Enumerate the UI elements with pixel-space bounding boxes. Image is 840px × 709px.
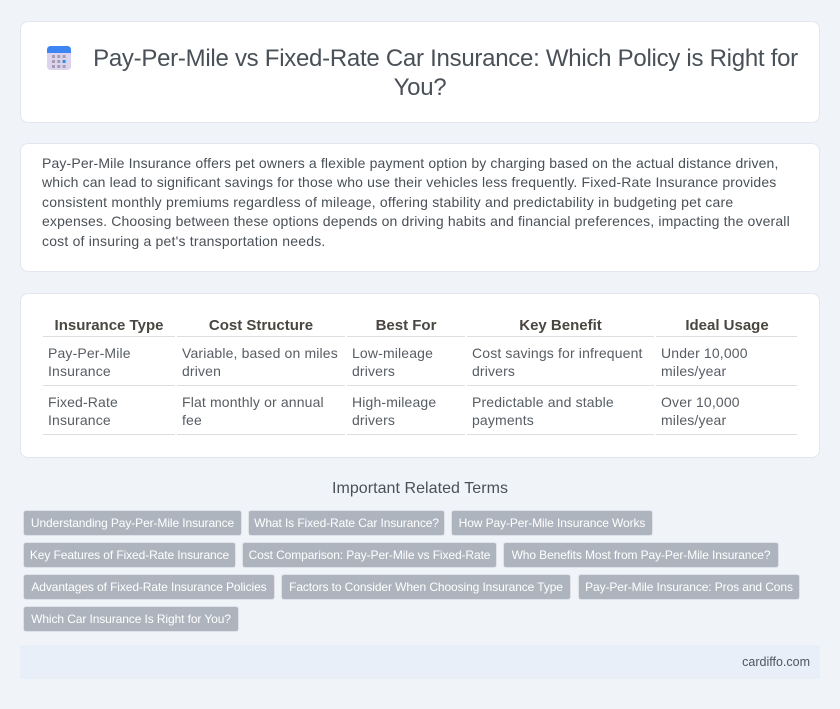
related terms tags: How Pay-Per-Mile Insurance Works: [459, 516, 645, 530]
comparison table: Under 10,000: [661, 345, 748, 361]
header panel: [20, 21, 820, 123]
intro text: consistent monthly premiums regardless of mileage, offering stability and predictability in budgeting pet care: [42, 194, 733, 210]
comparison table: Cost savings for infrequent: [472, 345, 643, 361]
comparison table: Insurance: [48, 412, 111, 428]
comparison table: Variable, based on miles: [182, 345, 338, 361]
comparison table: Best For: [376, 317, 436, 334]
related terms tags: Who Benefits Most from Pay-Per-Mile Insurance?: [512, 548, 770, 562]
comparison table: Low-mileage: [352, 345, 433, 361]
footer source: cardiffo.com: [742, 655, 810, 669]
footer: [20, 645, 820, 679]
comparison table: Over 10,000: [661, 394, 740, 410]
comparison table: miles/year: [661, 363, 726, 379]
comparison table: Ideal Usage: [685, 317, 769, 334]
intro text: which can lead to significant savings for those who use their vehicles less frequently. Fixed-Rate Insurance provides: [42, 174, 776, 190]
comparison table: driven: [182, 363, 221, 379]
comparison table: Flat monthly or annual: [182, 394, 324, 410]
related terms tags: Advantages of Fixed-Rate Insurance Policies: [31, 580, 267, 594]
comparison table: payments: [472, 412, 534, 428]
comparison table: High-mileage: [352, 394, 436, 410]
comparison table: Key Benefit: [519, 317, 602, 334]
comparison table: drivers: [472, 363, 515, 379]
related terms tags: Factors to Consider When Choosing Insurance Type: [289, 580, 563, 594]
table panel: [20, 293, 820, 458]
title: Pay-Per-Mile vs Fixed-Rate Car Insurance: Which Policy is Right for: [93, 45, 798, 72]
intro text: Pay-Per-Mile Insurance offers pet owners a flexible payment option by charging based on the actual distance driven,: [42, 155, 778, 171]
title: You?: [394, 74, 446, 101]
comparison table: miles/year: [661, 412, 726, 428]
related terms tags: What Is Fixed-Rate Car Insurance?: [254, 516, 439, 530]
comparison table: drivers: [352, 363, 395, 379]
comparison table: drivers: [352, 412, 395, 428]
comparison table: Pay-Per-Mile: [48, 345, 131, 361]
related terms tags: Pay-Per-Mile Insurance: Pros and Cons: [585, 580, 793, 594]
comparison table: Predictable and stable: [472, 394, 614, 410]
related terms tags: Which Car Insurance Is Right for You?: [31, 612, 231, 626]
related terms tags: [23, 510, 800, 632]
intro text: expenses. Choosing between these options depends on driving habits and financial preferences, impacting the overall: [42, 213, 790, 229]
comparison table: fee: [182, 412, 202, 428]
icon: calendar: [47, 46, 71, 70]
comparison table: Insurance: [48, 363, 111, 379]
intro text: [42, 155, 790, 249]
related terms tags: Cost Comparison: Pay-Per-Mile vs Fixed-Rate: [249, 548, 490, 562]
comparison table: Cost Structure: [209, 317, 313, 334]
related terms tags: Key Features of Fixed-Rate Insurance: [30, 548, 229, 562]
related terms tags: Understanding Pay-Per-Mile Insurance: [31, 516, 234, 530]
related terms heading: Important Related Terms: [332, 480, 508, 497]
comparison table: Fixed-Rate: [48, 394, 118, 410]
comparison table: Insurance Type: [55, 317, 163, 334]
intro panel: [20, 143, 820, 272]
comparison table: [43, 317, 797, 435]
intro text: cost of insuring a pet's transportation needs.: [42, 233, 325, 249]
title: [93, 45, 798, 101]
